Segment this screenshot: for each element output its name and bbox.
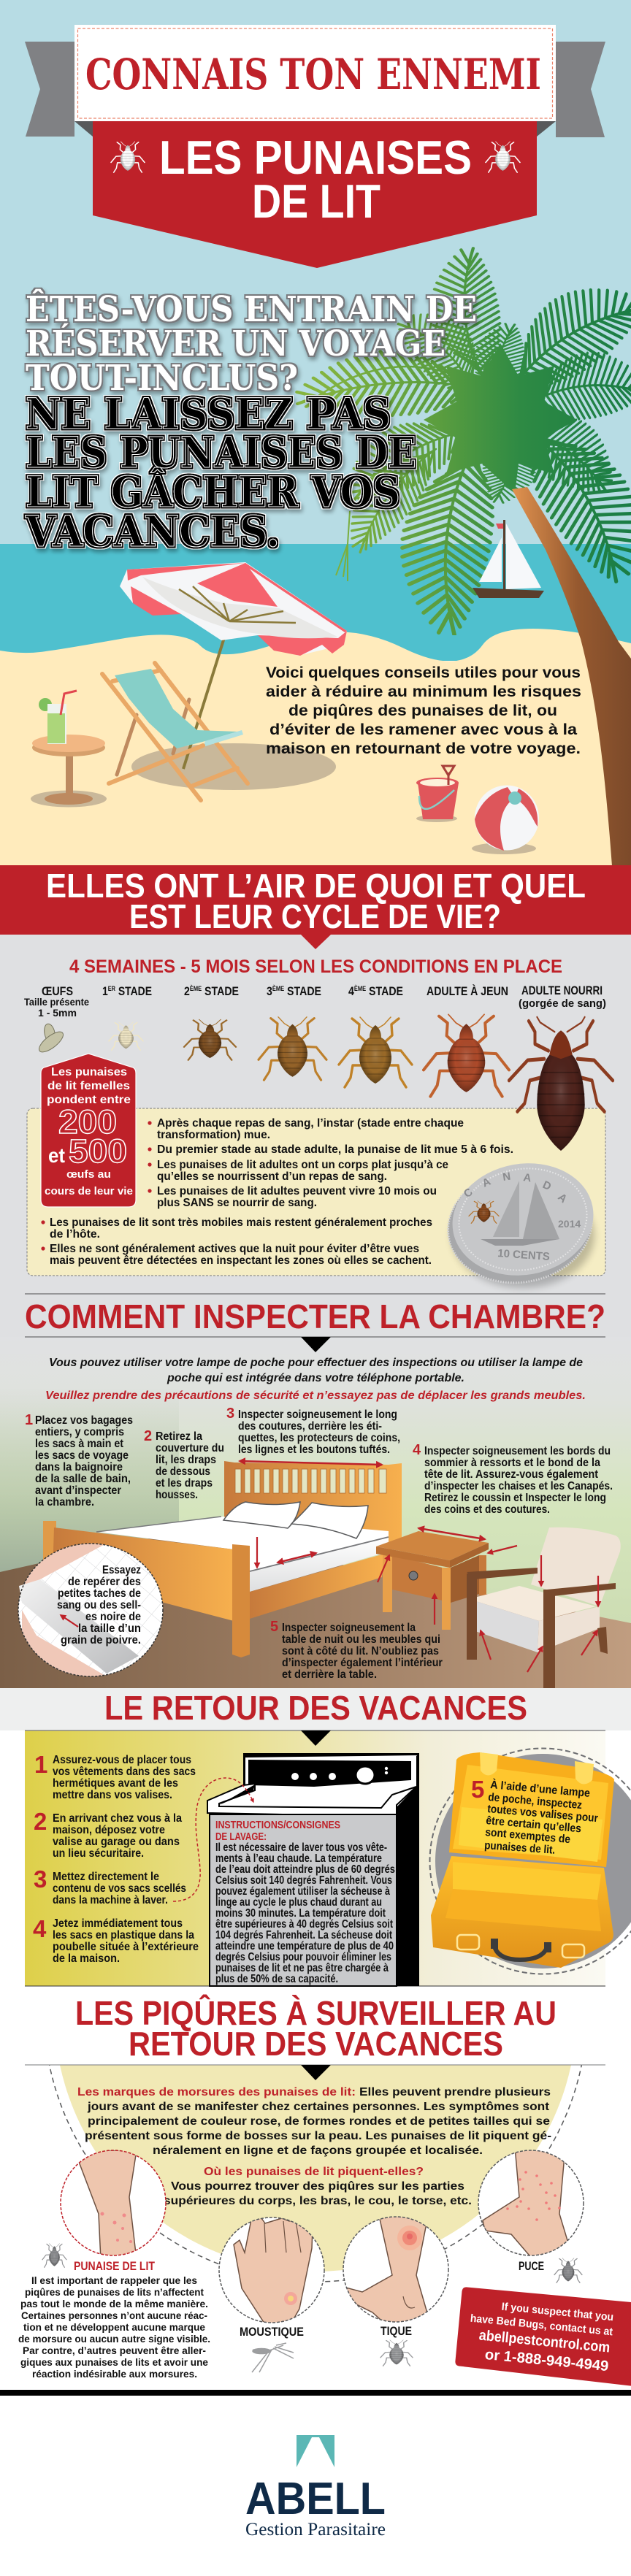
step 2: et les draps — [156, 1477, 213, 1490]
suitcase text: punaises de lit. — [484, 1839, 556, 1857]
step 2: 2 — [144, 1428, 152, 1444]
suitcase text — [471, 1776, 599, 1857]
headline: LIT GÂCHER VOS — [26, 467, 400, 517]
suitcase text: sont exemptes de — [485, 1826, 571, 1846]
magnifier text: de repérer des — [68, 1576, 141, 1588]
badge: eggs count: cours de leur vie — [45, 1185, 133, 1197]
stage labels: 4 — [348, 984, 355, 998]
callout: contact: have Bed Bugs, contact us at — [470, 2312, 613, 2338]
coin: ten cents: A — [481, 1176, 493, 1190]
return step 3: 3 — [34, 1866, 47, 1893]
logo: Abell: Gestion Parasitaire — [245, 2520, 386, 2539]
stage labels: STADE — [202, 984, 239, 998]
front panel — [210, 1814, 397, 1986]
heading: bites: LES PIQÛRES À SURVEILLER AU — [75, 1994, 557, 2032]
washing instructions: atteindre une température de plus de 40 — [215, 1940, 394, 1952]
bullet list: transformation) mue. — [157, 1129, 270, 1141]
stage labels: Taille présente — [24, 996, 89, 1008]
headline: RÉSERVER UN VOYAGE — [26, 323, 445, 364]
badge: eggs count: et — [48, 1144, 65, 1167]
return step 1: hermétiques avant de les — [53, 1777, 178, 1790]
bed bug bite label and text: pas tout le monde de la même manière. — [20, 2298, 208, 2309]
bed bug bite label and text: tion et ne développent aucune marque — [23, 2321, 205, 2333]
stage labels: ÈME — [190, 985, 202, 992]
magnifier text: sang ou des sell- — [57, 1599, 141, 1611]
washing instructions — [215, 1819, 395, 1985]
return step 4: de la maison. — [53, 1952, 120, 1965]
headline — [25, 288, 477, 556]
stage labels: ADULTE NOURRI — [521, 984, 603, 997]
inspection intro: Vous pouvez utiliser votre lampe de poche pour effectuer des inspections ou utiliser la lampe de — [49, 1357, 583, 1369]
step 4: sommier à ressorts et le bond de la — [424, 1457, 600, 1469]
logo: Abell: ABELL — [245, 2474, 386, 2524]
inspection steps — [25, 1406, 613, 1681]
return step 2: 2 — [34, 1808, 47, 1835]
callout: contact: If you suspect that you — [501, 2301, 614, 2323]
step 1: les sacs de voyage — [35, 1449, 129, 1462]
stage labels — [24, 984, 606, 1019]
header ribbon — [25, 25, 605, 268]
step 1: les sacs à main et — [35, 1438, 123, 1450]
yellow half circle — [49, 2065, 582, 2282]
step 5: Inspecter soigneusement la — [282, 1622, 416, 1634]
bedroom floor — [0, 1532, 631, 1688]
sailboat — [473, 520, 544, 598]
return step 4 — [33, 1915, 199, 1965]
headboard — [224, 1461, 402, 1552]
badge: eggs count: de lit femelles — [47, 1080, 130, 1092]
callout: contact: abellpestcontrol.com — [478, 2327, 611, 2356]
magnifier arrow — [61, 1615, 78, 1627]
bullet list: plus SANS se nourrir de sang. — [157, 1197, 317, 1209]
step 3: quettes, les protecteurs de coins, — [238, 1432, 400, 1444]
side table and drink — [31, 691, 107, 808]
beach ball — [472, 786, 539, 854]
side rails — [53, 1527, 234, 1621]
coin: ten cents: D — [540, 1178, 553, 1193]
icon: bug left — [111, 142, 145, 172]
step 2: lit, les draps — [156, 1454, 216, 1466]
step 4: Inspecter soigneusement les bords du — [424, 1445, 611, 1457]
return step 3: dans la machine à laver. — [53, 1894, 168, 1906]
intro text: Voici quelques conseils utiles pour vous — [266, 664, 581, 681]
return step 3: Mettez directement le — [53, 1871, 159, 1883]
bed bug bite label and text: de morsure ou aucun autre signe visible. — [18, 2333, 210, 2345]
bite description: Où les punaises de lit piquent-elles? — [204, 2166, 424, 2178]
coin: ten cents — [439, 1152, 603, 1294]
step 5: et derrière la table. — [282, 1668, 377, 1681]
bug: second stage — [184, 1019, 236, 1060]
step 4: tête de lit. Assurez-vous également — [424, 1468, 598, 1481]
washing instructions: Celsius soit 140 degrés Fahrenheit. Vous — [215, 1874, 392, 1887]
magnifier text: Essayez — [102, 1564, 141, 1576]
suitcase buckles — [457, 1935, 584, 1958]
subtitle: LES PUNAISES — [159, 131, 472, 184]
scene: beach — [0, 0, 631, 866]
step 3: Inspecter soigneusement le long — [238, 1408, 397, 1421]
illustration: nightstand — [376, 1531, 489, 1630]
beach chair shadow — [131, 743, 336, 790]
step 1: avant d’inspecter — [35, 1484, 121, 1497]
step 4: Retirez le coussin et Inspecter le long — [424, 1492, 606, 1504]
icon: egg — [36, 1023, 66, 1056]
bed bug bite label and text: PUNAISE DE LIT — [74, 2259, 156, 2273]
return steps — [33, 1751, 199, 1965]
bullet list: mais peuvent être détectées en inspectant les zones où elles se cachent. — [50, 1254, 432, 1267]
suitcase handle — [494, 1942, 548, 1960]
magnifier text: petites taches de — [58, 1587, 141, 1600]
return step 1: 1 — [34, 1751, 47, 1778]
illustration: bed — [43, 1461, 402, 1657]
stage labels: STADE — [115, 984, 152, 998]
heading: LE RETOUR DES VACANCES — [104, 1689, 527, 1727]
bed bug bite label and text: Par contre, d’autres peuvent être aller- — [23, 2345, 206, 2356]
bucket and shovel — [416, 766, 459, 822]
step 2: housses. — [156, 1489, 198, 1501]
step 3: les lignes et les boutons tuftés. — [238, 1444, 390, 1456]
washing instructions: être supérieures à 40 degrés Celsius soit — [215, 1918, 393, 1931]
return step 1: vos vêtements dans des sacs — [53, 1766, 196, 1778]
step 2: couverture du — [156, 1442, 224, 1454]
bullet list: Les punaises de lit sont très mobiles mais restent généralement proches — [50, 1216, 432, 1229]
bed bug bite label and text: Il est important de rappeler que les — [31, 2274, 197, 2286]
bug: first stage — [109, 1022, 143, 1050]
divider with arrow — [25, 2065, 605, 2080]
bed bug bite label and text — [18, 2259, 210, 2380]
step 1: la chambre. — [35, 1496, 94, 1509]
suitcase text: À l’aide d’une lampe — [490, 1779, 591, 1800]
circle: tick bite — [343, 2212, 448, 2326]
return step 4: Jetez immédiatement tous — [53, 1917, 183, 1930]
bug: third stage — [259, 1017, 326, 1080]
badge: eggs count: pondent entre — [47, 1094, 131, 1106]
icon: flea — [554, 2258, 582, 2282]
return step 2: maison, déposez votre — [53, 1824, 165, 1836]
armrests — [467, 1568, 616, 1688]
bed bug bite label and text: giques aux punaises de lits et avoir une — [20, 2356, 208, 2368]
step 5: table de nuit ou les meubles qui — [282, 1633, 440, 1646]
washing instructions: moins 30 minutes. La température doit — [215, 1907, 386, 1920]
magnifier text: grain de poivre. — [61, 1634, 141, 1647]
bite description: Elles peuvent prendre plusieurs — [359, 2086, 551, 2098]
icon: bug on coin — [469, 1201, 499, 1223]
section band: life cycle heading — [0, 865, 631, 949]
step 5: d’inspecter également l’intérieur — [282, 1657, 443, 1669]
intro text: d’éviter de les ramener avec vous à la — [269, 721, 577, 738]
stage labels: ADULTE À JEUN — [427, 984, 508, 998]
stage labels: ÈME — [354, 985, 366, 992]
suitcase lid — [449, 1752, 614, 1867]
heading: inspection — [25, 1294, 605, 1352]
red banner — [93, 121, 537, 268]
bullet list: Les punaises de lit adultes ont un corps plat jusqu’à ce — [157, 1159, 448, 1171]
headline: NE LAISSEZ PAS — [26, 389, 391, 439]
return step 3: contenu de vos sacs scellés — [53, 1882, 186, 1895]
icon: tick — [380, 2340, 413, 2366]
callout: contact — [455, 2287, 631, 2388]
arrows: inspection points — [240, 1461, 485, 1563]
logo: Abell — [245, 2435, 386, 2539]
pillows — [223, 1502, 300, 1528]
icon: mosquito — [252, 2343, 294, 2372]
bullet list: qu’elles se nourrissent d’un repas de sang. — [157, 1170, 387, 1183]
suitcase text: toutes vos valises pour — [487, 1803, 599, 1825]
step 1: entiers, y compris — [35, 1426, 124, 1438]
step 3: 3 — [226, 1406, 234, 1422]
washing instructions: 104 degrés Fahrenheit. La sécheuse doit — [215, 1929, 392, 1941]
washing instructions: INSTRUCTIONS/CONSIGNES — [215, 1819, 340, 1831]
suitcase text: 5 — [471, 1776, 484, 1803]
subtitle: DE LIT — [252, 175, 380, 228]
return step 1: Assurez-vous de placer tous — [53, 1754, 191, 1766]
step 1: dans la baignoire — [35, 1461, 123, 1473]
suitcase body — [431, 1856, 613, 1968]
illustration: washing machine — [173, 1753, 419, 1986]
bite description: supérieures du corps, les bras, le cou, le torse, etc. — [164, 2195, 472, 2207]
bullet list: Du premier stade au stade adulte, la punaise de lit mue 5 à 6 fois. — [157, 1143, 513, 1156]
coin: ten cents: 2014 — [558, 1218, 581, 1230]
washing instructions: DE LAVAGE: — [215, 1831, 267, 1843]
lid — [207, 1784, 416, 1817]
intro text: de piqûres des punaises de lit, ou — [288, 702, 557, 719]
section background: grey and bedroom wall — [0, 935, 631, 1688]
washing instructions: linge au cycle le plus chaud durant au — [215, 1896, 382, 1909]
return step 1: mettre dans vos valises. — [53, 1789, 172, 1801]
palm trunk — [512, 487, 631, 866]
suitcase text: de poche, inspectez — [488, 1791, 583, 1812]
step 1: de la salle de bain, — [35, 1473, 131, 1485]
bed bug bite label and text: Certaines personnes n’ont aucune réac- — [21, 2309, 207, 2321]
step 2: Retirez la — [156, 1430, 202, 1443]
return step 2 — [34, 1808, 182, 1860]
section band: life cycle heading: ELLES ONT L’AIR DE QUOI ET QUEL — [46, 867, 586, 905]
step 1: 1 — [25, 1412, 33, 1428]
coin: ten cents: 10 CENTS — [497, 1247, 550, 1263]
step 5: sont à côté du lit. N’oubliez pas — [282, 1645, 439, 1657]
heading: bites: RETOUR DES VACANCES — [129, 2025, 503, 2063]
stage labels: ŒUFS — [42, 984, 73, 998]
label: mosquito: MOUSTIQUE — [240, 2325, 304, 2339]
deck chair — [102, 663, 248, 800]
circle: bed bug bites — [61, 2150, 166, 2260]
bug: fourth stage — [339, 1017, 412, 1087]
stage labels: 1 — [102, 984, 109, 998]
icon: bug right — [486, 142, 520, 172]
coin: ten cents: A — [522, 1171, 532, 1184]
step 4: 4 — [413, 1442, 421, 1458]
coin: ten cents: A — [555, 1191, 570, 1205]
bug: fed adult — [509, 1017, 613, 1151]
washing instructions: degrés Celsius pour pouvoir éliminer les — [215, 1951, 391, 1963]
black divider band — [0, 2390, 631, 2396]
magnifier text: la taille d’un — [78, 1622, 141, 1635]
bite description: Vous pourrez trouver des piqûres sur les parties — [171, 2180, 464, 2193]
coin: ten cents: N — [502, 1170, 511, 1184]
step 5 — [270, 1619, 443, 1681]
return step 2: En arrivant chez vous à la — [53, 1812, 182, 1825]
return step 2: valise au garage ou dans — [53, 1836, 180, 1848]
washing instructions: pouvez également utiliser la sécheuse à — [215, 1885, 390, 1898]
coin: ten cents: C — [462, 1186, 475, 1200]
intro text: aider à réduire au minimum les risques — [266, 683, 581, 700]
washing instructions: punaises de lit et ne pas être chargée à — [215, 1962, 389, 1974]
magnifier text: es noire de — [85, 1611, 141, 1623]
washing instructions: Il est nécessaire de laver tous vos vête- — [215, 1841, 387, 1854]
return step 4: 4 — [33, 1915, 47, 1942]
circle: flea bites — [478, 2147, 584, 2260]
intro text — [266, 664, 581, 757]
step 1: Placez vos bagages — [35, 1414, 133, 1427]
section band: life cycle heading: EST LEUR CYCLE DE VIE? — [129, 897, 501, 935]
step 5: 5 — [270, 1619, 278, 1635]
return step 4: les sacs en plastique dans la — [53, 1929, 194, 1941]
bullet list: Elles ne sont généralement actives que la nuit pour éviter d’être vues — [50, 1243, 419, 1255]
intro text: maison en retournant de votre voyage. — [266, 740, 581, 757]
return step 3 — [34, 1866, 186, 1906]
bullet list: Les punaises de lit adultes peuvent vivre 10 mois ou — [157, 1185, 437, 1197]
stage labels: ÈME — [272, 985, 284, 992]
bite description: principalement de couleur rose, de formes rondes et de petites tailles qui se — [88, 2115, 550, 2128]
bullet list: de l’hôte. — [50, 1228, 100, 1241]
bite description: néralement en ligne et de façons groupée et localisée. — [153, 2144, 483, 2157]
illustration: suitcase — [429, 1748, 631, 1974]
suitcase latches — [480, 1752, 594, 1785]
control panel — [248, 1760, 411, 1787]
subheading: duration: 4 SEMAINES - 5 MOIS SELON LES CONDITIONS EN PLACE — [69, 957, 562, 977]
bite description — [77, 2086, 551, 2207]
bed bug bite label and text: réaction indésirable aux morsures. — [32, 2368, 197, 2380]
suitcase text: être certain qu’elles — [486, 1814, 582, 1835]
callout: contact: or 1-888-949-4949 — [484, 2347, 609, 2374]
step 4: des coins et des coutures. — [424, 1503, 550, 1516]
step 1 — [25, 1412, 133, 1509]
umbrella — [120, 562, 347, 769]
magnifier: mattress detail — [15, 1541, 168, 1679]
circle: mosquito bite — [219, 2217, 324, 2326]
magnifier text — [57, 1564, 141, 1647]
bite description: présentent sous forme de bosses sur la peau. Les punaises de lit piquent gé- — [85, 2130, 551, 2142]
step 2: de dessous — [156, 1465, 210, 1478]
bullet list: Après chaque repas de sang, l’instar (stade entre chaque — [157, 1117, 464, 1130]
bullet list — [41, 1117, 513, 1267]
drawer knob — [409, 1571, 418, 1580]
badge: eggs count: œufs au — [66, 1168, 111, 1181]
dashed link — [173, 1778, 253, 1901]
badge: eggs count: Les punaises — [51, 1066, 127, 1078]
stage labels: 1 - 5mm — [38, 1007, 77, 1019]
white title box — [74, 25, 556, 121]
bite description: jours avant de se manifester chez certaines personnes. Les symptômes sont — [87, 2101, 550, 2113]
panel background — [25, 1730, 605, 1986]
bite description: Les marques de morsures des punaises de lit: — [77, 2086, 356, 2098]
front post — [232, 1544, 250, 1657]
bug: unfed adult — [424, 1014, 509, 1097]
return step 4: poubelle située à l’extérieure — [53, 1941, 199, 1953]
return step 2: un lieu sécuritaire. — [53, 1847, 144, 1860]
inspection intro: Veuillez prendre des précautions de sécurité et n’essayez pas de déplacer les grands meubles. — [45, 1389, 586, 1402]
step 4: d’inspecter les chaises et les Canapés. — [424, 1480, 613, 1492]
stage labels: ER — [108, 985, 115, 992]
footboard left post — [43, 1521, 56, 1576]
label: flea: PUCE — [519, 2259, 544, 2273]
badge: eggs count: 500 — [69, 1132, 127, 1170]
headline: VACANCES. — [25, 507, 280, 556]
step 3: des coutures, derrière les éti- — [238, 1420, 382, 1433]
arrows: single-headed — [257, 1537, 598, 1672]
headline: ÊTES-VOUS ENTRAIN DE — [26, 288, 477, 330]
palm fronds — [278, 241, 631, 635]
washing instructions: ments à l’eau chaude. La température — [215, 1852, 382, 1865]
inspection intro: poche qui est intégrée dans votre téléphone portable. — [167, 1372, 464, 1384]
washing instructions: plus de 50% de sa capacité. — [215, 1973, 338, 1985]
stage labels: 3 — [267, 984, 273, 998]
badge: eggs count: 200 — [58, 1103, 117, 1141]
bed bug bite label and text: piqûres de punaises de lits n’affectent — [25, 2286, 204, 2298]
badge: eggs count — [41, 1054, 136, 1207]
step 3 — [226, 1406, 400, 1456]
mattress — [96, 1517, 389, 1571]
section: return from vacation — [0, 1688, 631, 1986]
label: tick: TIQUE — [380, 2324, 412, 2338]
headline: TOUT-INCLUS? — [26, 358, 298, 399]
return step 1 — [34, 1751, 196, 1801]
washing instructions: de l’eau doit atteindre plus de 60 degrés — [215, 1863, 395, 1876]
illustration: armchair — [467, 1527, 621, 1688]
icon: bed bug — [42, 2244, 66, 2267]
subtitle — [111, 131, 520, 228]
inspection intro — [45, 1357, 586, 1402]
headline: LES PUNAISES DE — [26, 428, 416, 478]
stage labels: (gorgée de sang) — [519, 997, 606, 1010]
stage labels: STADE — [284, 984, 321, 998]
panel: facts — [27, 1108, 605, 1276]
stage labels: STADE — [366, 984, 403, 998]
heading: bites — [75, 1994, 557, 2063]
step 4 — [413, 1442, 613, 1516]
stage labels: 2 — [184, 984, 191, 998]
step 2 — [144, 1428, 224, 1501]
